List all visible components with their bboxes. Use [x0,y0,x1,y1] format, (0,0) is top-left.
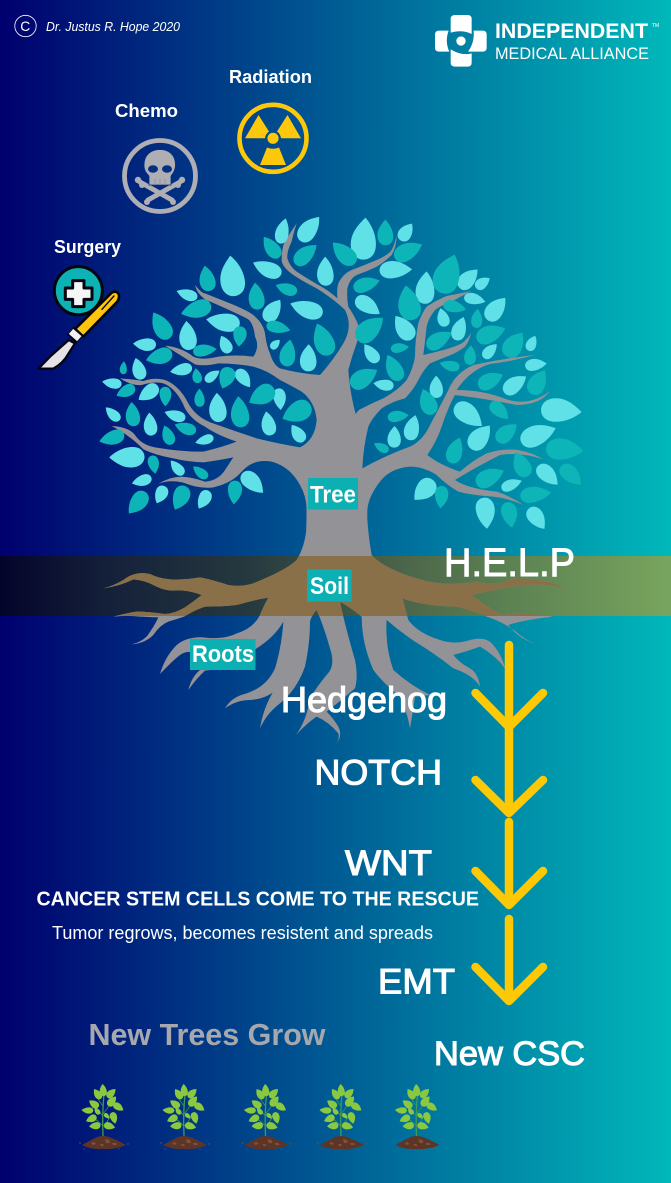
seedling 5 [393,1083,442,1150]
label: Tree: Tree [310,482,356,508]
light leaves [102,211,582,533]
logo: Independent Medical Alliance: TM [652,23,659,29]
icon: radiation symbol [240,105,306,172]
icon: medical cross and scalpel [38,267,119,369]
tree branches and trunk [112,223,550,540]
arrow: to EMT [476,919,543,1001]
seedling 1 [79,1083,129,1150]
pathway label: EMT: EMT [378,962,455,1001]
logo: Independent Medical Alliance [435,15,659,67]
tree roots [103,500,567,745]
seedling 2 [160,1083,210,1150]
logo: Independent Medical Alliance: MEDICAL ALLIANCE [495,44,649,63]
copyright notice: Dr. Justus R. Hope 2020 [46,20,180,34]
tree canopy [97,211,587,540]
label: Roots: Roots [192,641,254,668]
arrow: to WNT [476,822,543,905]
logo: Independent Medical Alliance: INDEPENDENT [495,20,648,43]
label: Chemo: Chemo [115,100,178,121]
subtext: tumor regrows: Tumor regrows, becomes resistent and spreads [52,923,433,943]
pathway label: New CSC: New CSC [434,1035,585,1073]
soil band [0,556,671,616]
label: Radiation: Radiation [229,66,312,87]
heading: H.E.L.P: H.E.L.P [444,541,575,585]
icon: skull and crossbones [124,140,196,212]
dark leaves [97,219,587,529]
arrow: first chain to Notch [476,645,543,813]
label: Soil: Soil [310,573,349,600]
seedling 4 [317,1083,367,1150]
headline: cancer stem cells: CANCER STEM CELLS COME TO THE RESCUE [36,888,479,911]
copyright notice [15,15,180,37]
pathway label: Hedgehog: Hedgehog [281,679,447,720]
label: Surgery: Surgery [54,236,122,257]
copyright notice: C [20,18,30,34]
pathway label: NOTCH: NOTCH [314,754,442,792]
heading: New Trees Grow: New Trees Grow [88,1017,326,1052]
icon: medical cross logo [435,15,487,67]
seedling 3 [242,1083,291,1150]
pathway label: WNT: WNT [345,844,432,883]
